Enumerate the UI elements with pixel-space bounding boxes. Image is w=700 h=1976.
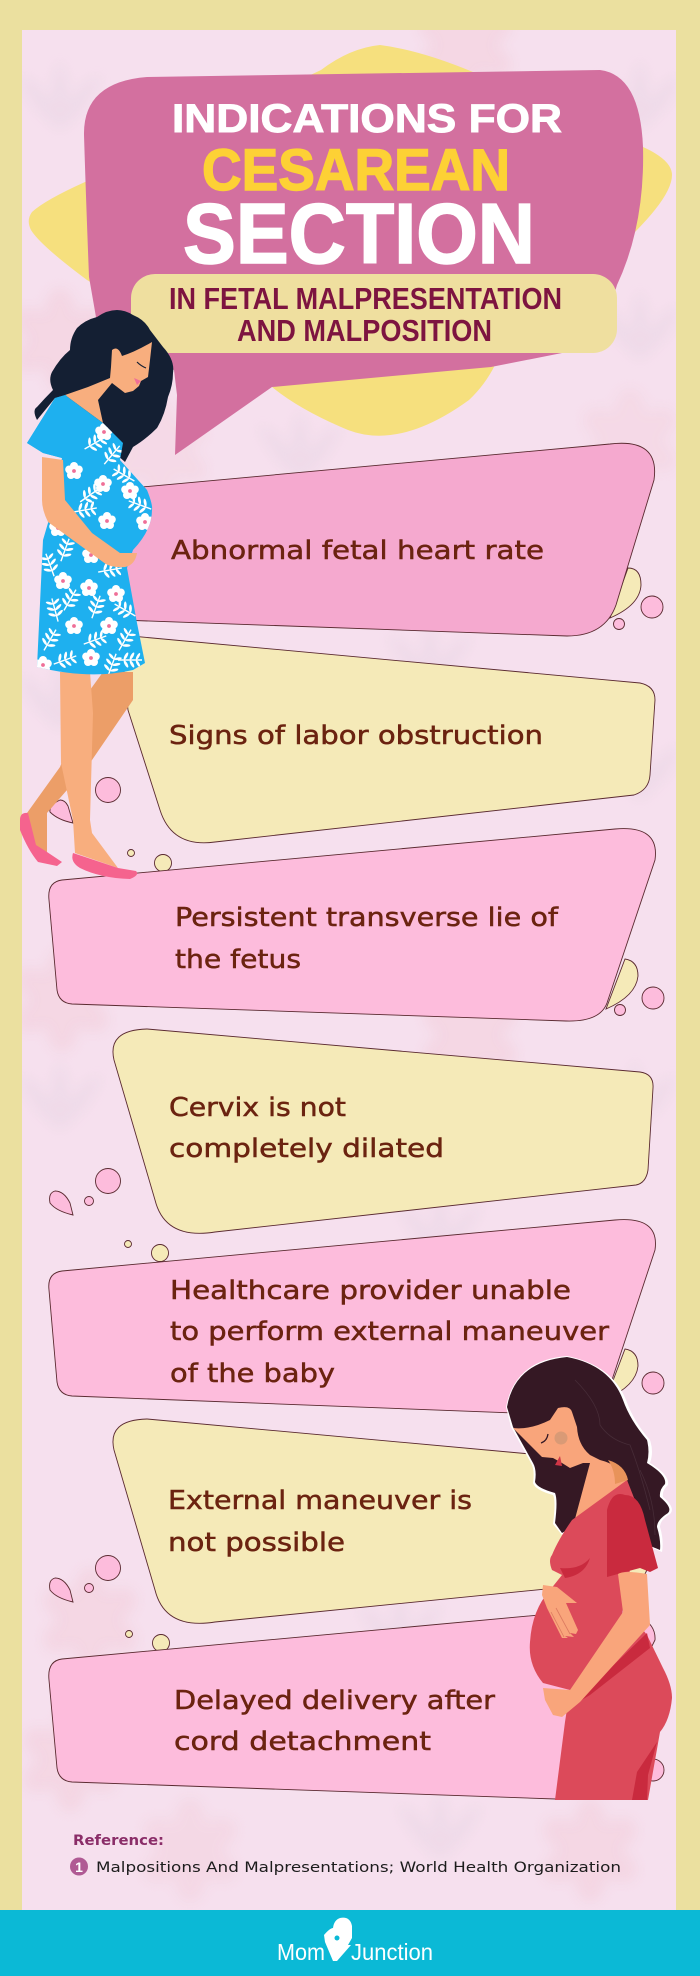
card 2: signs of labor obstruction: Signs of labor obstruction	[169, 721, 543, 751]
shoes	[20, 813, 137, 879]
card 7: delayed delivery: cord detachment	[174, 1727, 431, 1757]
footer bar	[0, 1910, 700, 1976]
reference text: Malpositions And Malpresentations; World Health Organization	[96, 1860, 621, 1876]
card 5: healthcare provider unable: of the baby	[170, 1359, 335, 1389]
card 6: external maneuver not possible: not possible	[168, 1528, 345, 1558]
card 5: healthcare provider unable: Healthcare provider unable	[170, 1276, 571, 1306]
card 3: persistent transverse lie: Persistent transverse lie of	[175, 903, 559, 933]
decorative bubbles: left side	[50, 778, 172, 1652]
card 4: cervix not dilated: Cervix is not	[169, 1093, 346, 1123]
title line: indications for: INDICATIONS FOR	[172, 97, 562, 141]
card 4: cervix not dilated	[113, 1029, 653, 1233]
title speech bubble	[84, 70, 643, 455]
neck shadow	[608, 1460, 628, 1484]
subtitle pill	[131, 274, 617, 353]
card 7: delayed delivery	[49, 1608, 620, 1800]
subtitle pill: IN FETAL MALPRESENTATION	[169, 281, 562, 316]
card 2: signs of labor obstruction	[120, 635, 655, 843]
title line: cesarean: CESAREAN	[202, 138, 510, 203]
reference number badge	[70, 1858, 88, 1876]
subtitle pill: AND MALPOSITION	[237, 313, 492, 348]
card 1: abnormal fetal heart rate	[120, 443, 655, 636]
dress floral pattern	[34, 423, 154, 679]
card 3: persistent transverse lie: the fetus	[175, 945, 301, 975]
logo: momjunction: Junction	[351, 1939, 433, 1965]
sleeve	[27, 395, 80, 460]
logo: momjunction	[277, 1918, 433, 1965]
lips	[134, 378, 141, 385]
decorative bubbles: right side	[606, 568, 664, 1781]
hair	[507, 1357, 669, 1550]
logo icon: mother and child	[324, 1918, 352, 1961]
eye	[541, 1434, 548, 1443]
card 6: external maneuver not possible	[113, 1419, 653, 1623]
title line: section: SECTION	[183, 187, 535, 282]
card 4: cervix not dilated: completely dilated	[169, 1134, 444, 1164]
back leg	[27, 672, 133, 852]
front leg	[60, 672, 118, 868]
logo: momjunction: Mom	[277, 1939, 325, 1965]
card 6: external maneuver not possible: External maneuver is	[168, 1486, 472, 1516]
dress	[27, 395, 152, 674]
card 3: persistent transverse lie	[49, 829, 655, 1021]
closed eye	[137, 362, 146, 368]
card 5: healthcare provider unable: to perform external maneuver	[170, 1317, 609, 1347]
dress dark band	[582, 1633, 657, 1800]
sleeve	[607, 1494, 658, 1577]
references	[70, 1833, 621, 1876]
skin: face, neck and chest	[513, 1407, 628, 1518]
hair strand highlights	[575, 1380, 655, 1535]
skin: face, neck and chest	[65, 342, 152, 423]
lips	[555, 1456, 562, 1466]
reference number badge: 1	[75, 1859, 83, 1875]
yellow blob behind title	[29, 45, 672, 436]
upper hand on belly	[542, 1585, 578, 1638]
dress body	[530, 1480, 672, 1800]
bust shadow	[560, 1558, 590, 1578]
arm and lower hand	[543, 1572, 650, 1717]
illustration: pregnant woman in blue dress	[20, 310, 173, 879]
arm	[42, 457, 137, 567]
card 1: abnormal fetal heart rate: Abnormal fetal heart rate	[171, 536, 544, 566]
card 7: delayed delivery: Delayed delivery after	[174, 1686, 495, 1716]
hair outline	[506, 1356, 672, 1552]
illustration: pregnant woman in red dress	[506, 1356, 672, 1800]
card 5: healthcare provider unable	[49, 1220, 655, 1415]
reference heading: Reference:	[73, 1833, 164, 1849]
hair	[34, 310, 173, 462]
cheek	[554, 1432, 568, 1444]
